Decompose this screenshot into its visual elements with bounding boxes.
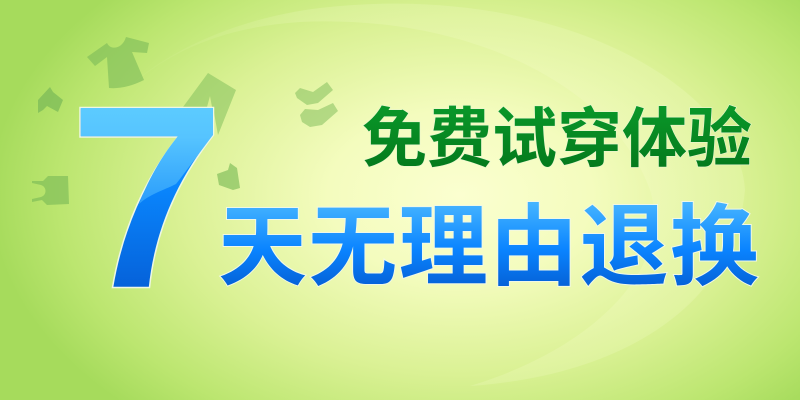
icon: folded shirt: [217, 163, 240, 190]
icon: t-shirt: [87, 37, 149, 88]
icon: trousers: [183, 73, 236, 135]
headline: free trial: 免费试穿体验: [362, 102, 752, 175]
icon: small shirt: [38, 87, 63, 113]
icon: socks: [295, 82, 338, 127]
icon: tank top: [32, 176, 69, 205]
headline: 7-day returns: 天无理由退换: [218, 197, 759, 297]
big seven: [80, 108, 214, 288]
gloss on seven: [80, 108, 214, 205]
